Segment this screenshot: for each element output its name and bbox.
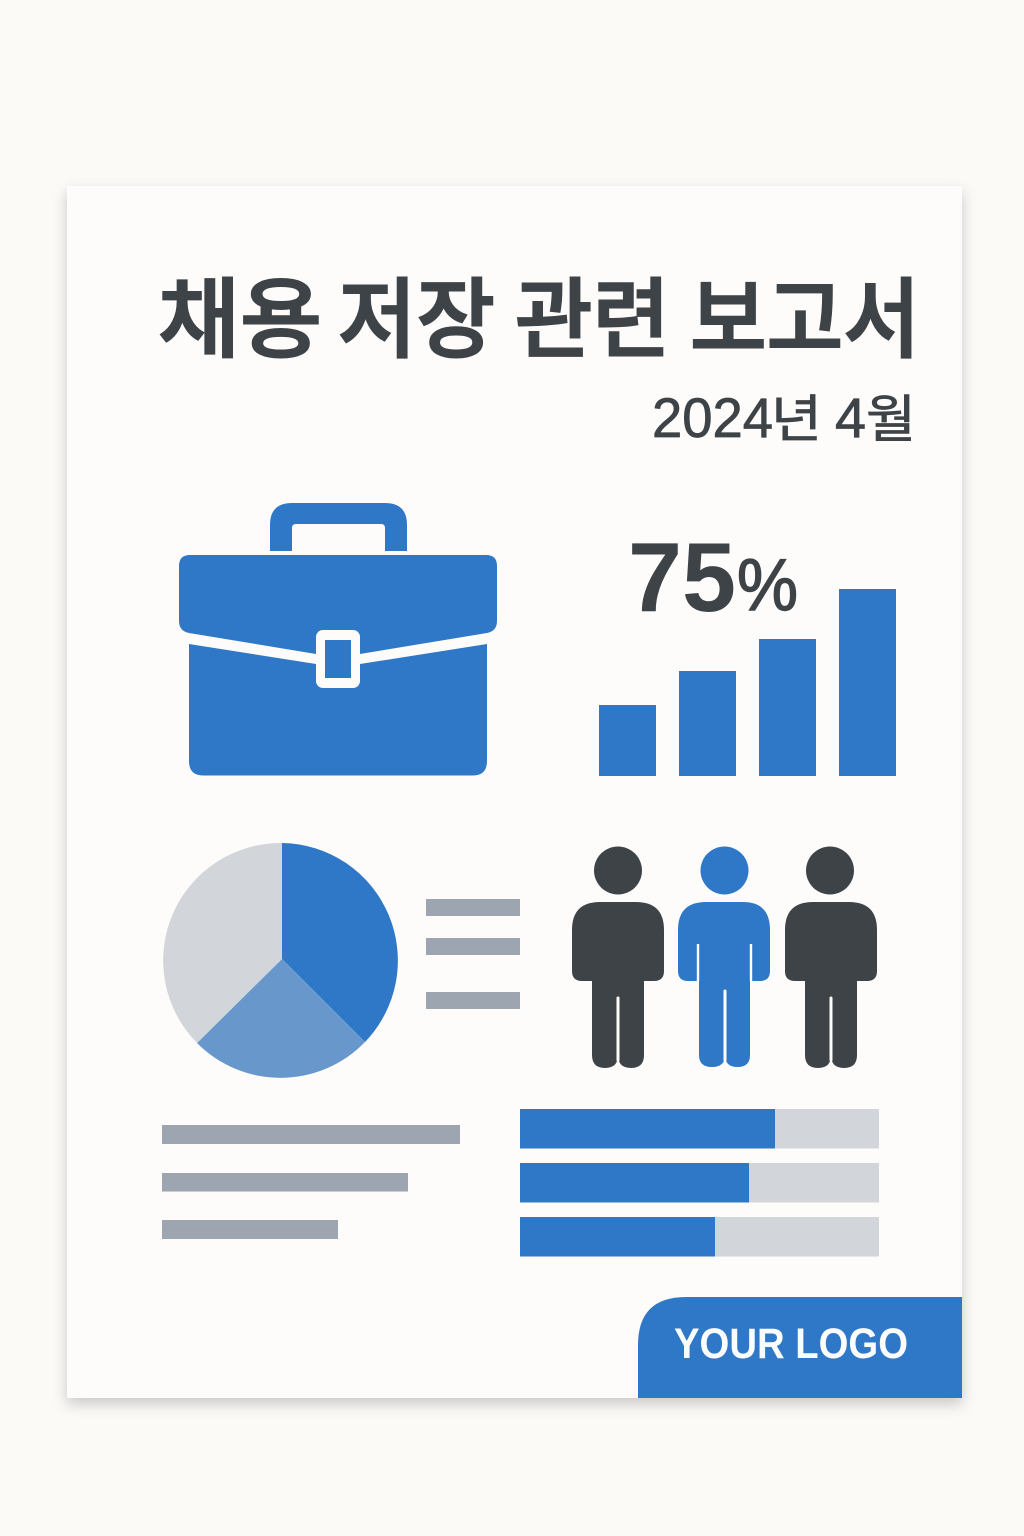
logo badge: [638, 1297, 962, 1398]
title: [158, 272, 920, 369]
subtitle: date: 4: [835, 386, 866, 449]
text placeholder lines: [162, 1125, 460, 1239]
icon: person right: [785, 846, 877, 1068]
pie chart: [163, 843, 398, 1078]
subtitle: date: 2024: [652, 386, 773, 449]
stat: 75 percent: %: [737, 545, 798, 626]
panel: report page: [67, 186, 962, 1398]
subtitle: date: 월: [866, 378, 916, 452]
icon: person left: [572, 846, 664, 1068]
subtitle: date: [652, 378, 916, 452]
progress bars: [520, 1109, 879, 1256]
stat: 75 percent: [628, 522, 798, 632]
logo badge: YOUR LOGO: [674, 1320, 908, 1368]
stat: 75 percent: 75: [628, 522, 736, 632]
icon: briefcase: [179, 503, 497, 776]
pie legend lines: [426, 899, 520, 1009]
bar chart: [599, 589, 896, 776]
icon: person center: [678, 846, 770, 1067]
title: 저장: [338, 272, 495, 369]
title: 관련: [515, 272, 670, 369]
subtitle: date: 년: [771, 378, 822, 452]
title: 보고서: [690, 272, 920, 369]
title: 채용: [158, 272, 322, 369]
